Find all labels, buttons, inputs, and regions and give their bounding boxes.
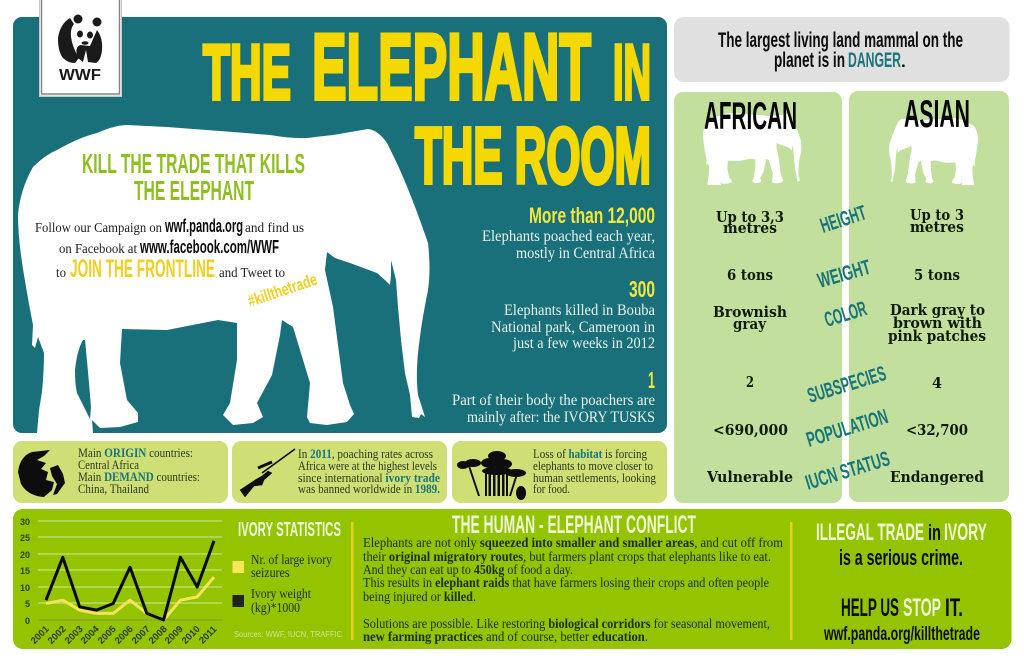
comparison labels: POPULATION	[804, 405, 891, 452]
chart: ivory statistics line chart: 0	[25, 616, 30, 626]
stat: 1: mainly after: the IVORY TUSKS	[467, 409, 655, 426]
callout: illegal trade	[816, 519, 987, 570]
text: poaching rates: Africa were at the highest levels	[298, 458, 437, 473]
values: African: 2	[746, 373, 754, 391]
panel: Asian elephant	[849, 91, 1009, 502]
stat: more than 12,000	[482, 203, 655, 262]
legend: ivory seizures: Nr. of large ivory	[251, 552, 332, 567]
text: campaign call to action: on Facebook at	[59, 242, 137, 257]
comparison labels: SUBSPECIES	[805, 362, 889, 408]
stat: 300: Elephants killed in Bouba	[504, 302, 655, 319]
stat: 1: Part of their body the poachers are	[452, 392, 655, 409]
panel: tagline: .	[901, 52, 906, 71]
comparison labels: COLOR	[822, 297, 870, 332]
chart: ivory statistics line chart: 2002	[46, 624, 69, 647]
text: campaign call to action: to	[56, 266, 66, 281]
text: conflict paragraph	[363, 535, 783, 644]
stat: 300: 300	[629, 276, 655, 302]
values: Asian: Up to 3	[910, 206, 964, 224]
chart: ivory statistics line chart: 2009	[163, 624, 186, 647]
heading: Asian: ASIAN	[904, 93, 970, 136]
chart: ivory statistics line chart: 2007	[130, 624, 153, 647]
text: loss of habitat: human settlements, looking	[533, 470, 656, 485]
stat: 300: just a few weeks in 2012	[512, 335, 655, 352]
chart: ivory statistics line chart: 2004	[79, 623, 102, 647]
text: poaching rates	[298, 446, 440, 496]
panel: tagline	[674, 17, 1010, 82]
values: Asian: Dark gray to	[890, 301, 985, 319]
chart: ivory statistics line chart: 10	[20, 583, 30, 593]
heading: kill the trade: KILL THE TRADE THAT KILLS	[82, 148, 305, 179]
stat: more than 12,000: More than 12,000	[529, 203, 655, 228]
callout: illegal trade: ILLEGAL TRADE	[816, 519, 924, 546]
values: Asian: 5 tons	[914, 266, 960, 284]
illustration: large white elephant	[18, 125, 430, 433]
callout: illegal trade: in	[928, 520, 941, 545]
text: poaching rates: In 2011, poaching rates across	[298, 446, 433, 461]
text: origin and demand: Central Africa	[78, 457, 139, 472]
chart: ivory statistics line chart: 15	[20, 566, 30, 576]
values: Asian: <32,700	[906, 421, 968, 439]
text: campaign call to action: Follow our Campaign on	[35, 221, 162, 236]
icon: rifle	[240, 449, 295, 497]
chart: ivory statistics line chart: 2003	[63, 624, 86, 647]
text: conflict paragraph: their original migratory routes, but farmers plant crops that elephants like to eat.	[363, 549, 771, 564]
text: loss of habitat	[533, 446, 656, 496]
heading: African: AFRICAN	[704, 95, 797, 138]
title: ELEPHANT	[312, 14, 591, 119]
panel: loss of habitat	[452, 441, 667, 503]
panel: African elephant	[674, 92, 842, 503]
heading: ivory statistics: IVORY STATISTICS	[238, 519, 341, 541]
panel: poaching rates	[232, 441, 447, 503]
stat: more than 12,000: Elephants poached each year,	[482, 228, 655, 245]
values: African: gray	[733, 315, 767, 333]
text: loss of habitat: Loss of habitat is forcing	[533, 446, 647, 461]
text: origin and demand: Main ORIGIN countries:	[78, 445, 193, 460]
icon: trees	[457, 451, 526, 500]
heading: kill the trade: THE ELEPHANT	[134, 175, 254, 206]
legend: ivory weight: Ivory weight	[251, 586, 311, 601]
panel: tagline: planet is in	[774, 49, 845, 72]
text: origin and demand: China, Thailand	[78, 481, 149, 496]
text: conflict paragraph: And they can eat up to 450kg of food a day.	[363, 562, 573, 577]
text: loss of habitat: for food.	[533, 481, 570, 496]
chart: ivory statistics line chart: 2001	[29, 623, 52, 647]
chart: ivory statistics line chart	[20, 517, 222, 647]
values: Asian: pink patches	[888, 327, 986, 345]
panel: main teal hero	[13, 14, 667, 433]
panel: tagline: DANGER	[848, 49, 901, 72]
values: Asian: metres	[910, 218, 964, 236]
values: African: Brownish	[713, 303, 787, 321]
text: campaign call to action: #killthetrade	[245, 270, 320, 311]
stat: 300: National park, Cameroon in	[491, 319, 655, 336]
chart: ivory statistics line chart: 5	[25, 599, 30, 609]
values: African: <690,000	[713, 421, 788, 439]
comparison labels: IUCN STATUS	[803, 447, 893, 495]
callout: illegal trade: IVORY	[944, 519, 987, 546]
text: conflict paragraph: This results in elephant raids that have farmers losing their crops and often people	[363, 575, 769, 590]
chart: ivory statistics line chart: 2005	[96, 623, 119, 647]
legend: ivory weight	[232, 586, 311, 615]
text: campaign call to action: and Tweet to	[219, 266, 285, 281]
values: Asian: brown with	[893, 314, 982, 332]
chart: ivory statistics line chart: 20	[20, 550, 30, 560]
text: campaign call to action: and find us	[245, 221, 304, 236]
title: THE ROOM	[415, 111, 651, 200]
values: Asian	[888, 206, 986, 486]
text: poaching rates: was banned worldwide in 1989.	[298, 481, 440, 496]
text: conflict paragraph: Solutions are possible. Like restoring biological corridors for seasonal movement,	[363, 616, 770, 631]
title	[203, 14, 651, 200]
text: campaign call to action: JOIN THE FRONTLINE	[70, 255, 215, 283]
chart: ivory statistics line chart: 30	[20, 517, 30, 527]
callout: help us stop it: STOP	[903, 594, 941, 622]
text: loss of habitat: elephants to move closer to	[533, 458, 653, 473]
text: conflict paragraph: Elephants are not only squeezed into smaller and smaller areas, and cut off from	[363, 535, 783, 550]
text: conflict paragraph: new farming practices and of course, better education.	[363, 629, 648, 644]
values: African: metres	[723, 219, 777, 237]
text: campaign call to action: wwf.panda.org	[164, 216, 243, 236]
callout: help us stop it: IT.	[945, 594, 963, 622]
values: Asian: 4	[932, 374, 942, 392]
logo: WWF panda	[39, 0, 122, 97]
text: campaign call to action: www.facebook.com/WWF	[139, 237, 279, 257]
values: African: 6 tons	[727, 266, 773, 284]
icon: Asian elephant silhouette	[889, 118, 978, 185]
chart: ivory statistics line chart: 2011	[197, 624, 220, 646]
chart: ivory statistics line chart: 2008	[147, 624, 170, 647]
stat: 1: 1	[648, 367, 655, 393]
legend: ivory seizures: seizures	[251, 565, 290, 580]
panel: bottom green band	[13, 509, 1012, 649]
text: origin and demand: Main DEMAND countries:	[78, 469, 200, 484]
comparison labels: HEIGHT	[817, 201, 869, 238]
comparison labels	[803, 201, 893, 495]
text: origin and demand	[78, 445, 200, 496]
heading: kill the trade	[82, 148, 305, 206]
callout: help us stop it	[823, 594, 980, 645]
text: conflict paragraph: being injured or killed.	[363, 589, 476, 604]
chart: ivory statistics line chart: 25	[20, 533, 30, 543]
title: THE	[203, 28, 291, 116]
sources: Sources: WWF, IUCN, TRAFFIC	[234, 630, 342, 639]
values: African: Up to 3,3	[716, 208, 784, 226]
callout: help us stop it: HELP US	[841, 594, 899, 622]
chart: ivory statistics line chart: 2006	[113, 624, 136, 647]
legend: ivory weight: (kg)*1000	[251, 600, 300, 615]
icon: globe	[18, 450, 65, 497]
legend: ivory seizures	[232, 552, 332, 580]
panel: origin and demand	[13, 441, 228, 503]
text: campaign call to action	[35, 216, 320, 311]
comparison labels: WEIGHT	[815, 256, 873, 293]
logo: WWF panda: WWF	[59, 67, 101, 84]
panel: main teal hero: IN	[613, 28, 651, 116]
stat: 1	[452, 367, 655, 426]
chart: ivory statistics line chart: 2010	[180, 624, 203, 647]
stat: more than 12,000: mostly in Central Africa	[516, 245, 655, 262]
text: poaching rates: since international ivory trade	[298, 470, 440, 485]
heading: the human-elephant conflict: THE HUMAN - ELEPHANT CONFLICT	[452, 511, 696, 539]
values: African	[706, 208, 793, 486]
values: Asian: Endangered	[890, 468, 984, 486]
stat: 300	[491, 276, 655, 352]
values: African: Vulnerable	[706, 468, 793, 486]
icon: African elephant silhouette	[703, 113, 801, 185]
